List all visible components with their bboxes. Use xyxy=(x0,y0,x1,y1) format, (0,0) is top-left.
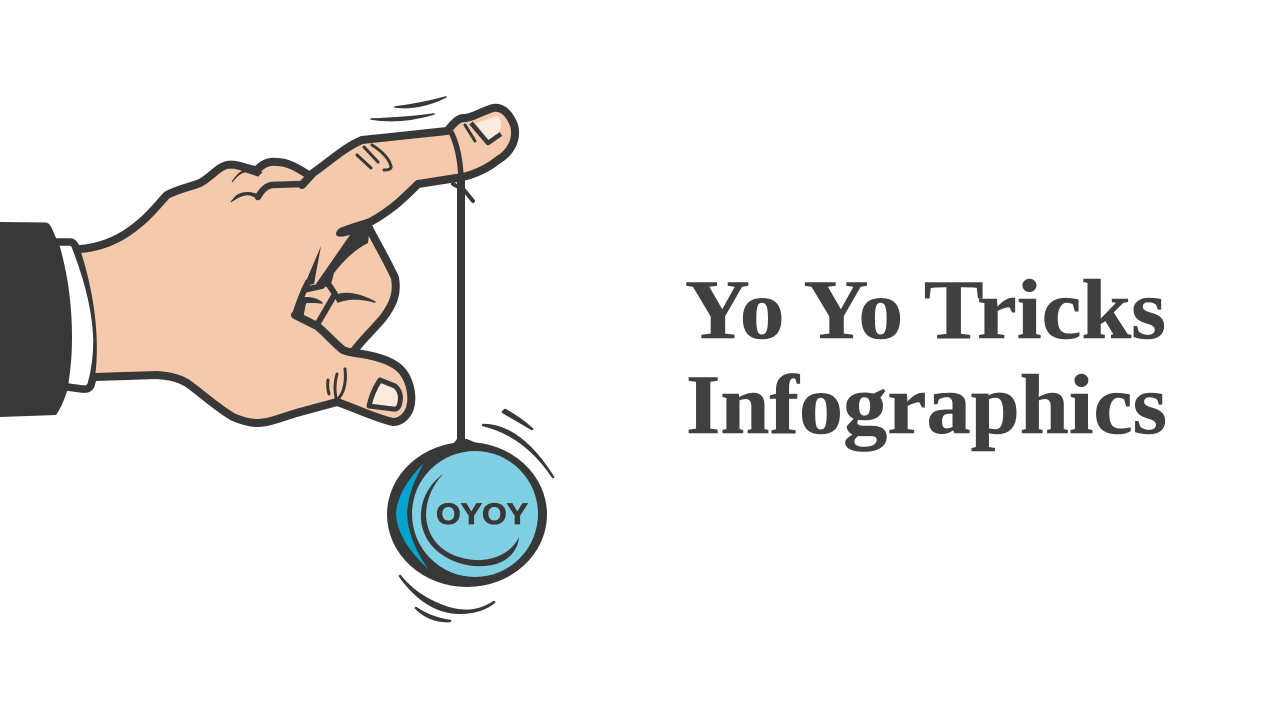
index wrinkles xyxy=(357,125,475,170)
illustration: hand with yo-yo xyxy=(0,97,553,621)
hand outline xyxy=(80,108,515,423)
finger fold wedge xyxy=(304,224,370,288)
curled finger lines xyxy=(295,282,335,323)
string xyxy=(457,178,465,444)
thumbnail xyxy=(369,380,400,409)
title xyxy=(685,263,1167,452)
thumb wrinkles xyxy=(328,369,345,402)
motion lines yo-yo xyxy=(400,410,553,621)
index fingernail xyxy=(476,116,501,141)
nail edge xyxy=(471,123,501,143)
title line 2: Infographics xyxy=(686,358,1167,452)
yo-yo face xyxy=(412,451,538,577)
string knot xyxy=(453,184,473,201)
hand xyxy=(80,108,515,423)
motion lines top xyxy=(371,97,446,121)
title line 1: Yo Yo Tricks xyxy=(685,263,1166,357)
shirt cuff xyxy=(52,242,97,389)
yo-yo text: OYOY xyxy=(436,498,528,531)
groove arc xyxy=(421,474,519,566)
sleeve xyxy=(0,222,72,417)
hand silhouette xyxy=(80,108,515,423)
yo-yo stem xyxy=(449,439,479,449)
string loop xyxy=(451,132,461,178)
yo-yo body xyxy=(387,442,547,587)
finger crease lines xyxy=(303,294,375,303)
yo-yo xyxy=(387,439,547,587)
knuckle lines xyxy=(258,184,302,197)
blue crescent xyxy=(396,463,428,569)
